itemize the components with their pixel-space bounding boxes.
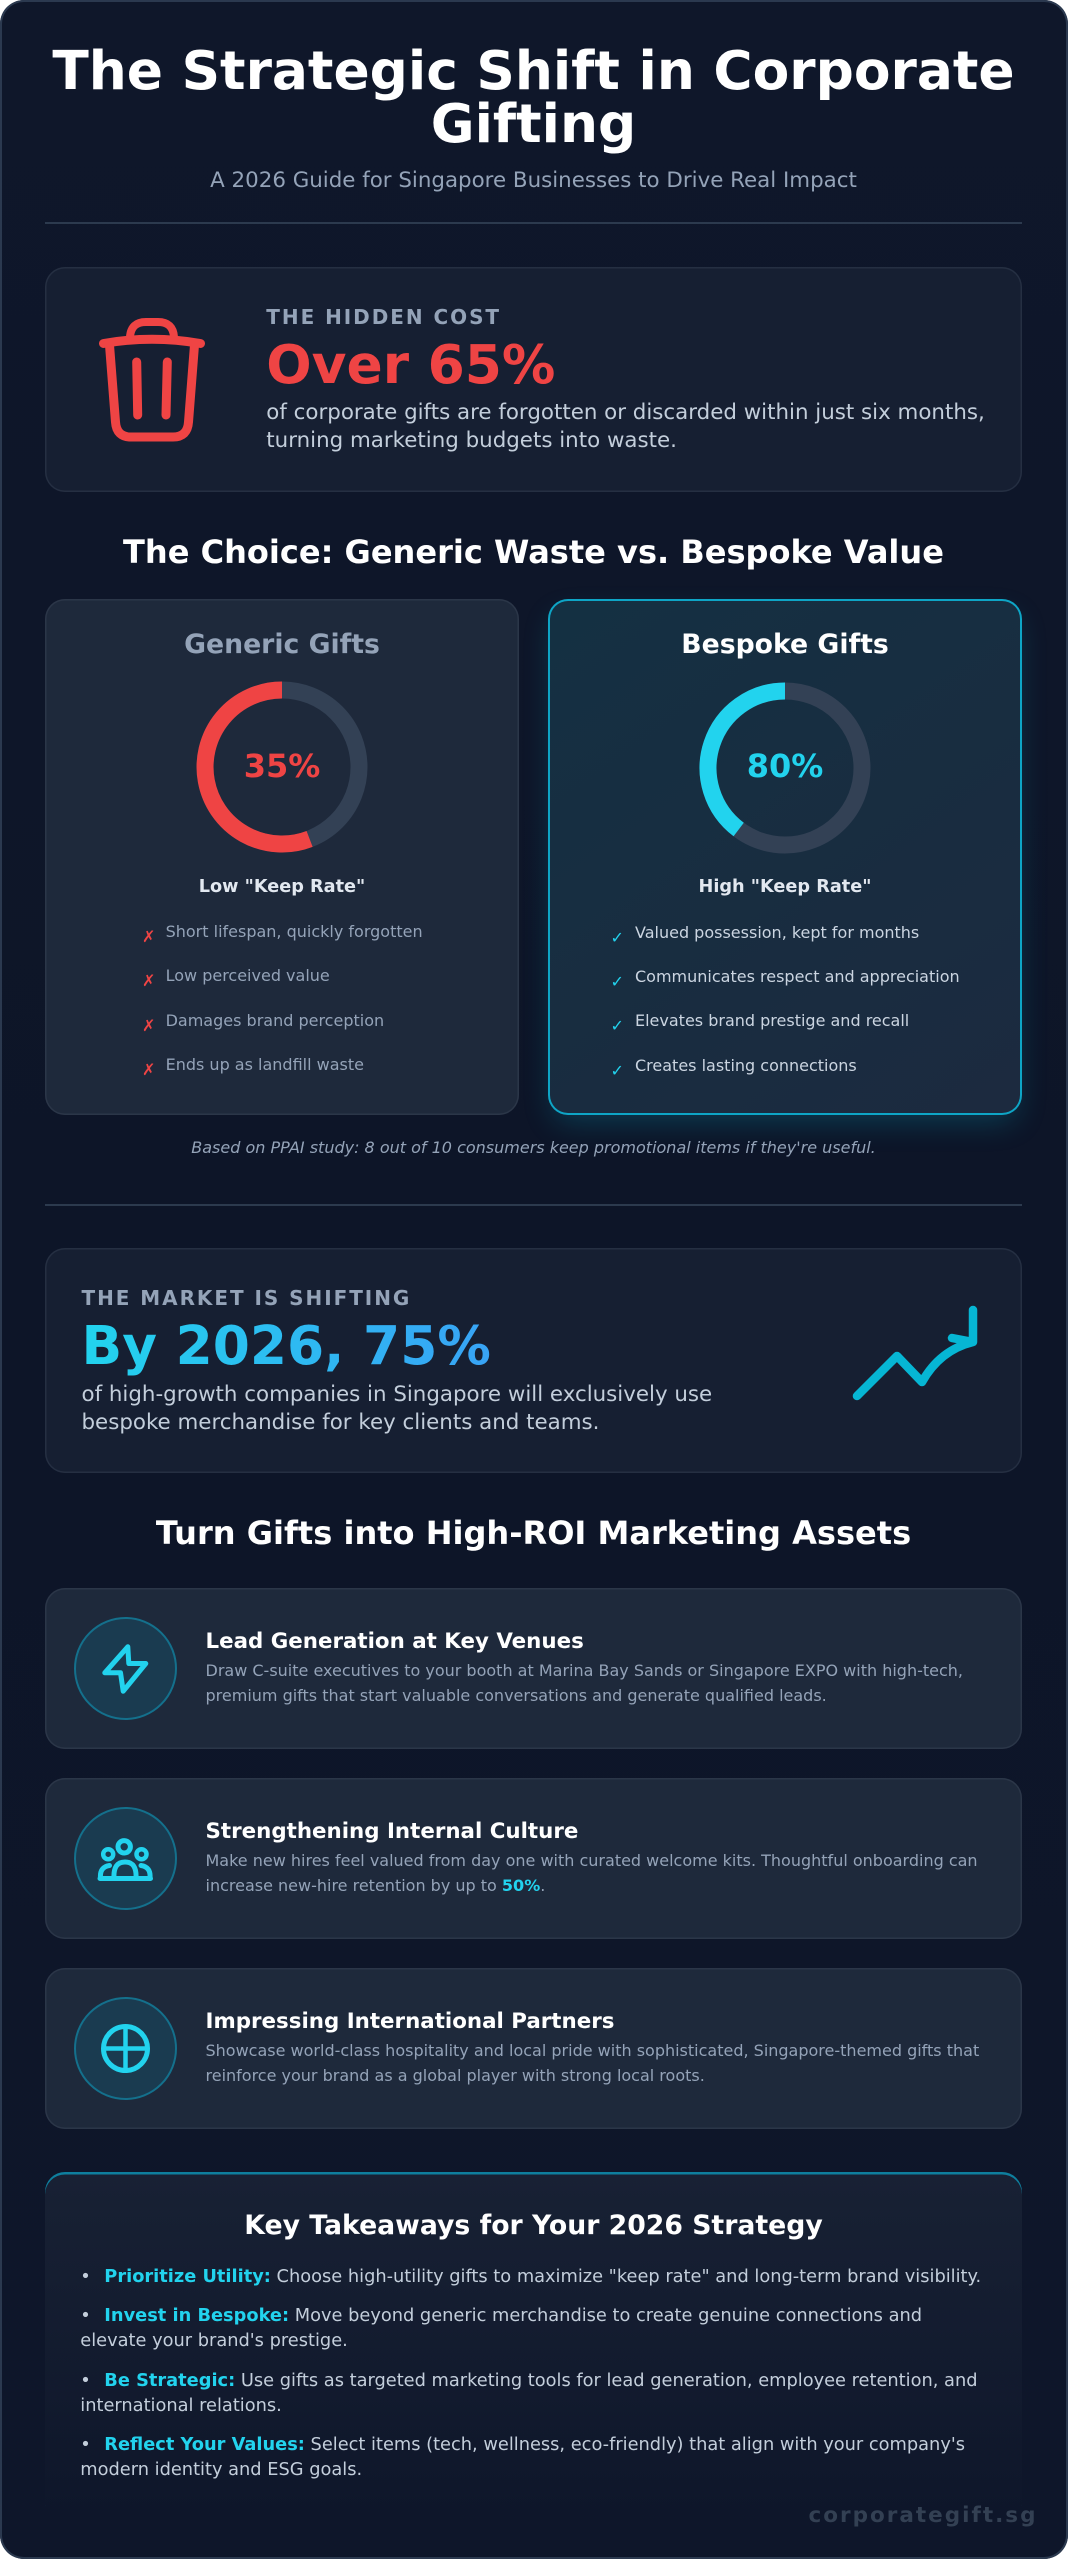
watermark: corporategift.sg: [808, 2503, 1038, 2528]
takeaway: reflect your values: •: [80, 2434, 91, 2455]
list: generic drawbacks: Damages brand perception: [166, 1011, 384, 1030]
text: international partners: reinforce your brand as a global player with strong local roots.: [206, 2066, 705, 2085]
subtitle: A 2026 Guide for Singapore Businesses to Drive Real Impact: [210, 168, 857, 192]
description: market: [82, 1382, 712, 1434]
description: market: of high-growth companies in Singapore will exclusively use: [82, 1382, 712, 1406]
takeaway: invest in bespoke: elevate your brand's prestige.: [80, 2330, 348, 2351]
label: high keep rate: High "Keep Rate": [699, 877, 871, 897]
label: the market is shifting: THE MARKET IS SHIFTING: [82, 1286, 411, 1310]
text: international partners: [206, 2041, 979, 2085]
list: generic drawbacks: [142, 922, 423, 1079]
takeaway: prioritize utility: Prioritize Utility: Choose high-utility gifts to maximize "keep rate" and long-term brand visibility.: [104, 2266, 981, 2287]
heading: lead generation: Lead Generation at Key Venues: [206, 1629, 584, 1654]
list: generic drawbacks: Ends up as landfill waste: [166, 1055, 364, 1074]
heading: high-roi assets: Turn Gifts into High-ROI Marketing Assets: [156, 1514, 911, 1552]
donut value: 35%: 35%: [244, 747, 320, 785]
text: lead generation: [206, 1661, 963, 1705]
label: the hidden cost: THE HIDDEN COST: [266, 305, 501, 329]
description: hidden cost: of corporate gifts are forgotten or discarded within just six months,: [266, 400, 985, 425]
list: bespoke benefits: Creates lasting connections: [635, 1056, 857, 1075]
stat: over 65%: Over 65%: [266, 333, 555, 396]
heading: the choice: The Choice: Generic Waste vs. Bespoke Value: [123, 533, 944, 571]
donut chart: 35%: [196, 682, 368, 852]
icon: lightning bolt: [74, 1617, 177, 1720]
list: generic drawbacks: Low perceived value: [166, 966, 330, 985]
icon: trending arrow: [852, 1306, 978, 1400]
panel: key takeaways: [45, 2172, 1022, 2522]
title: The Strategic Shift in Corporate: [52, 39, 1015, 102]
title: [52, 39, 1015, 155]
icon: globe: [74, 1997, 177, 2100]
list: generic drawbacks: ✗: [142, 971, 155, 990]
title: Gifting: [431, 92, 636, 155]
list: generic drawbacks: Short lifespan, quickly forgotten: [166, 922, 423, 941]
text: internal culture: [206, 1851, 978, 1895]
heading: internal culture: Strengthening Internal Culture: [206, 1819, 578, 1844]
heading: generic gifts: Generic Gifts: [184, 629, 380, 660]
donut value: 80%: 80%: [747, 747, 823, 785]
icon: trash can: [99, 318, 205, 442]
description: hidden cost: [266, 400, 985, 453]
list: bespoke benefits: ✓: [610, 928, 624, 946]
heading: bespoke gifts: Bespoke Gifts: [681, 629, 889, 660]
list: bespoke benefits: Communicates respect and appreciation: [635, 967, 960, 986]
card: internal culture: [45, 1778, 1022, 1939]
takeaway: invest in bespoke: [80, 2305, 922, 2351]
stat: by 2026, 75%: By 2026, 75%: [82, 1314, 491, 1377]
panel: generic gifts: [45, 599, 519, 1115]
panel: bespoke gifts: [548, 599, 1022, 1115]
icon: people group: [74, 1807, 177, 1910]
text: internal culture: increase new-hire retention by up to 50%.: [206, 1876, 545, 1895]
donut chart: 80%: [699, 682, 870, 854]
heading: international partners: Impressing International Partners: [206, 2009, 614, 2034]
takeaway: be strategic: international relations.: [80, 2395, 282, 2416]
panel: the hidden cost: [45, 267, 1022, 492]
text: internal culture: Make new hires feel valued from day one with curated welcome kits. Thoughtful onboarding can: [206, 1851, 978, 1870]
takeaway: be strategic: Be Strategic: Use gifts as targeted marketing tools for lead generation, employee retention, and: [104, 2370, 978, 2391]
takeaway: reflect your values: [80, 2434, 965, 2480]
list: generic drawbacks: ✗: [142, 1016, 155, 1035]
takeaway: reflect your values: modern identity and ESG goals.: [80, 2459, 362, 2480]
list: bespoke benefits: ✓: [610, 1016, 624, 1035]
list: bespoke benefits: Elevates brand prestige and recall: [635, 1011, 909, 1030]
list: bespoke benefits: [610, 922, 960, 1080]
list: generic drawbacks: ✗: [142, 1060, 155, 1079]
description: hidden cost: turning marketing budgets into waste.: [266, 428, 677, 453]
text: international partners: Showcase world-class hospitality and local pride with sophisticated, Singapore-themed gifts that: [206, 2041, 979, 2060]
footnote: source: Based on PPAI study: 8 out of 10 consumers keep promotional items if they're useful.: [191, 1138, 876, 1156]
takeaway: reflect your values: Reflect Your Values: Select items (tech, wellness, eco-friendly) that align with your company's: [104, 2434, 965, 2455]
takeaway: invest in bespoke: •: [80, 2305, 91, 2326]
label: low keep rate: Low "Keep Rate": [199, 877, 365, 897]
list: bespoke benefits: Valued possession, kept for months: [635, 922, 919, 942]
panel: the market is shifting: [45, 1248, 1022, 1473]
text: lead generation: Draw C-suite executives to your booth at Marina Bay Sands or Singapore EXPO with high-tech,: [206, 1661, 963, 1680]
takeaway: invest in bespoke: Invest in Bespoke: Move beyond generic merchandise to create genuine connections and: [104, 2305, 922, 2326]
list: bespoke benefits: ✓: [610, 1061, 624, 1080]
takeaway: be strategic: [80, 2370, 978, 2416]
text: lead generation: premium gifts that start valuable conversations and generate qualified leads.: [206, 1686, 827, 1705]
card: lead generation: [45, 1588, 1022, 1749]
description: market: bespoke merchandise for key clients and teams.: [82, 1410, 599, 1434]
takeaway: prioritize utility: •: [80, 2266, 91, 2287]
card: international partners: [45, 1968, 1022, 2129]
heading: key takeaways: Key Takeaways for Your 2026 Strategy: [244, 2210, 823, 2241]
list: bespoke benefits: ✓: [610, 972, 624, 991]
list: generic drawbacks: ✗: [142, 927, 155, 946]
takeaway: be strategic: •: [80, 2370, 91, 2391]
